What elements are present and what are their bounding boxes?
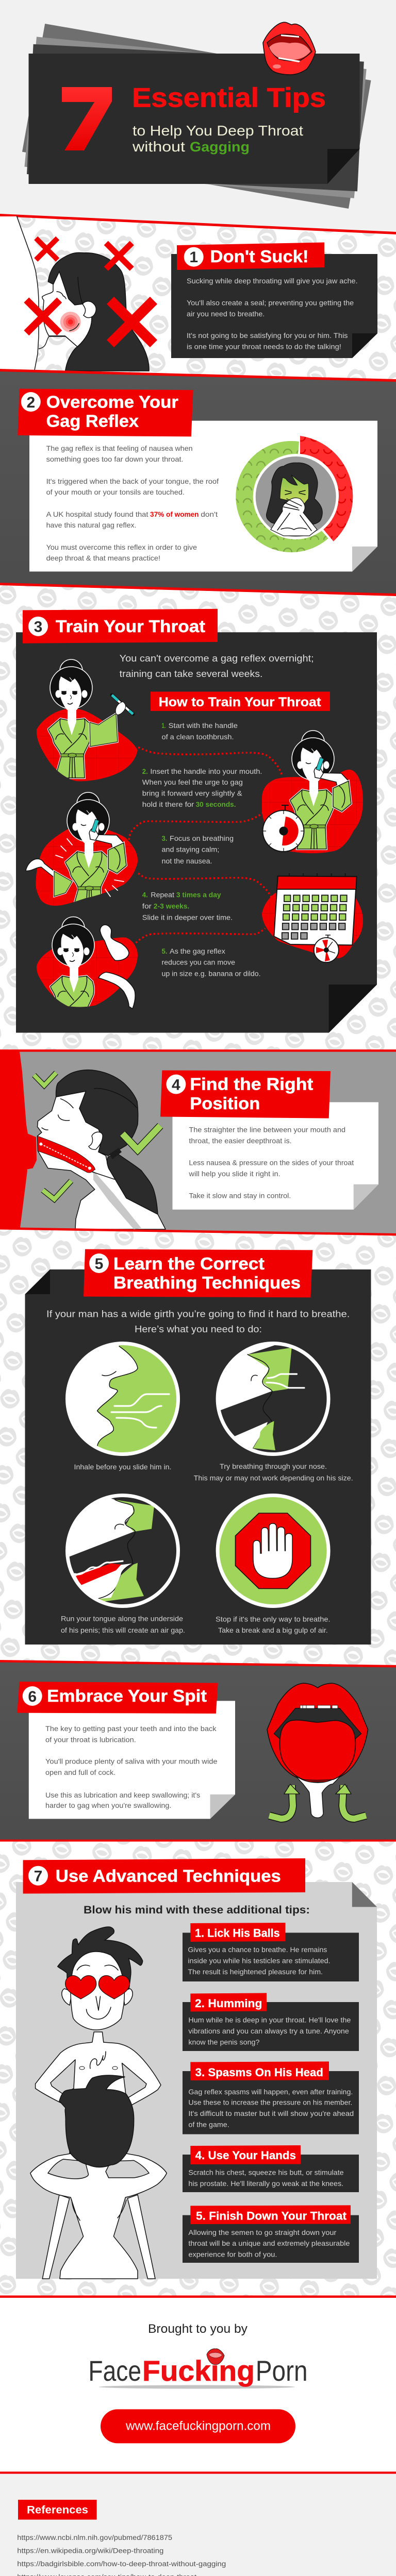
body text: have this natural gag reflex. xyxy=(46,521,137,529)
body text: of your mouth or your tonsils are touched. xyxy=(46,488,185,496)
body text: Sucking while deep throating will give you jaw ache. xyxy=(187,277,358,285)
illustration: stop circle xyxy=(218,1495,328,1606)
heading label: Train Your Throat xyxy=(56,617,205,636)
body text: of your throat is lubrication. xyxy=(45,1735,136,1743)
heading label: 7 xyxy=(34,1868,42,1885)
logo: Porn xyxy=(256,2354,308,2387)
illustration: open mouth with saliva xyxy=(267,1683,368,1819)
sponsor intro: Brought to you by xyxy=(148,2322,248,2336)
heading label: Learn the Correct xyxy=(113,1254,265,1273)
caption: stop xyxy=(216,1615,331,1634)
body text xyxy=(46,444,219,562)
curtain edge xyxy=(0,216,39,371)
illustration: woman with crosses xyxy=(0,216,154,371)
section 5 background xyxy=(0,1227,396,1666)
section 2 background xyxy=(0,369,396,595)
panel: tip 4 xyxy=(160,1071,378,1210)
body text: don't xyxy=(201,510,218,518)
sore cheek xyxy=(60,312,81,332)
caption: nose xyxy=(194,1462,353,1482)
references label xyxy=(18,2500,97,2520)
tip card 4: his prostate. He'll literally go weak at the knees. xyxy=(188,2179,343,2188)
step 3 text: Focus on breathing xyxy=(170,834,234,842)
tip card 1: 1. Lick His Balls xyxy=(195,1926,280,1939)
body text: It's not going to be satisfying for you or him. This xyxy=(187,331,348,340)
illustration: nose breathing circle xyxy=(206,1340,328,1458)
panel: references xyxy=(0,2471,396,2576)
heading label xyxy=(18,388,193,436)
caption: inhale: Inhale before you slide him in. xyxy=(74,1463,171,1471)
heading label xyxy=(17,1682,218,1714)
references label: References xyxy=(27,2504,88,2516)
stacked back cards xyxy=(22,24,371,209)
face xyxy=(70,1952,124,2030)
tip card 1: Gives you a chance to breathe. He remains xyxy=(188,1945,327,1954)
step 3 text: not the nausea. xyxy=(162,857,212,865)
step 5 text: up in size e.g. banana or dildo. xyxy=(162,970,261,978)
title numeral xyxy=(62,87,112,150)
partner figure edge xyxy=(0,1052,37,1228)
subheading label: How to Train Your Throat xyxy=(159,695,321,709)
page fold xyxy=(327,149,360,184)
face xyxy=(42,272,92,347)
body text xyxy=(45,1724,218,1809)
tip card 3: 3. Spasms On His Head xyxy=(195,2066,323,2079)
heading label: Embrace Your Spit xyxy=(47,1686,207,1705)
step 2 text: bring it forward very slightly & xyxy=(142,789,242,798)
step 3 text: and staying calm; xyxy=(162,845,219,853)
tip card 2: 2. Humming xyxy=(195,1997,262,2010)
section 4 background xyxy=(0,1049,396,1234)
illustration: tongue circle xyxy=(57,1489,178,1606)
body text: You'll also create a seal; preventing you getting the xyxy=(187,299,354,307)
page fold xyxy=(210,1794,235,1819)
body text: The key to getting past your teeth and into the back xyxy=(45,1724,217,1733)
tip card 5: Allowing the semen to go straight down your xyxy=(188,2228,337,2236)
step 4 text: 4. xyxy=(142,890,148,899)
heading label: Overcome Your xyxy=(46,393,178,412)
section 7 background xyxy=(0,1839,396,2296)
step 5 text: reduces you can move xyxy=(162,958,235,967)
heading label: Breathing Techniques xyxy=(113,1273,301,1292)
tip card 5: 5. Finish Down Your Throat xyxy=(196,2210,346,2223)
heading label: 5 xyxy=(95,1256,103,1273)
body text: Take it slow and stay in control. xyxy=(189,1191,291,1199)
step 5 text: 5. xyxy=(162,947,167,955)
heading label: Use Advanced Techniques xyxy=(56,1866,281,1885)
heading label xyxy=(177,242,324,270)
figure blobs xyxy=(36,708,363,1007)
body text: will help you slide it right in. xyxy=(188,1170,280,1178)
references list: https://badgirlsbible.com/how-to-deep-throat-without-gagging xyxy=(17,2560,226,2568)
section 1 background xyxy=(0,214,396,380)
step 2 text: 30 seconds. xyxy=(196,800,236,808)
panel: tip 6 xyxy=(17,1682,235,1819)
caption: stop: Take a break and a big gulp of air. xyxy=(218,1626,328,1634)
cross 1 xyxy=(36,238,58,260)
body text: harder to gag when you're swallowing. xyxy=(45,1801,171,1809)
subtitle line 1: to Help You Deep Throat xyxy=(133,123,303,139)
logo: Face xyxy=(88,2354,141,2387)
website button xyxy=(101,2409,295,2443)
tip card 3 xyxy=(183,2061,359,2134)
subtitle line 2: without xyxy=(132,139,185,155)
section 6 background xyxy=(0,1660,396,1840)
logo xyxy=(88,2349,308,2388)
page fold xyxy=(352,1882,377,1907)
heading label xyxy=(23,1858,305,1894)
body text: Use this as lubrication and keep swallowing; it's xyxy=(45,1791,200,1799)
heading label: Gag Reflex xyxy=(46,412,139,431)
step 4 text: 3 times a day xyxy=(176,890,221,899)
step 1 text: 1. xyxy=(162,721,166,730)
torso and arms xyxy=(36,2032,161,2154)
tip card 4: 4. Use Your Hands xyxy=(195,2149,296,2162)
tip card 3: of the game. xyxy=(188,2121,229,2129)
step 2 text: hold it there for xyxy=(142,800,194,808)
step 3 text xyxy=(162,834,234,865)
body text: You'll produce plenty of saliva with your mouth wide xyxy=(45,1757,218,1765)
tip card 5: throat will be a unique and extremely pleasurable xyxy=(188,2239,350,2247)
section 3 background xyxy=(0,583,396,1049)
tip card 4 xyxy=(183,2145,359,2192)
panel: hero xyxy=(0,0,396,233)
icon: lips xyxy=(263,22,316,75)
tip card 3: It's difficult to master but it will show you're ahead xyxy=(188,2109,354,2117)
website button: www.facefuckingporn.com xyxy=(125,2419,271,2433)
panel: tip 5 xyxy=(25,1249,371,1645)
references list: https://en.wikipedia.org/wiki/Deep-throating xyxy=(17,2547,163,2554)
heading label: 2 xyxy=(26,394,35,411)
body text xyxy=(188,1125,354,1199)
panel: tip 7 xyxy=(16,1858,377,2279)
step 4 text: for xyxy=(142,902,152,910)
ear xyxy=(89,1132,103,1149)
body text: Less nausea & pressure on the sides of your throat xyxy=(189,1159,354,1167)
step 5 text: As the gag reflex xyxy=(170,947,225,955)
step 2 text: 2. xyxy=(142,767,148,775)
caption: tongue xyxy=(61,1615,185,1634)
cross 2 xyxy=(106,243,132,269)
chart: 37% donut xyxy=(236,436,353,552)
step 4 text: 2-3 weeks. xyxy=(154,902,189,910)
illustration: inhale circle xyxy=(67,1340,186,1461)
body text: The straighter the line between your mouth and xyxy=(189,1125,345,1133)
step 5 text xyxy=(162,947,261,978)
heading label: Position xyxy=(190,1094,260,1113)
step 3 text: 3. xyxy=(162,834,167,842)
icon: logo lips xyxy=(207,2349,224,2365)
subheading label xyxy=(151,691,330,711)
body text: deep throat & that means practice! xyxy=(46,554,160,562)
heading label: Don't Suck! xyxy=(210,247,308,266)
figure 5: woman with larger objects xyxy=(50,916,136,1009)
step 2 text: Insert the handle into your mouth. xyxy=(150,767,262,775)
intro text: You can't overcome a gag reflex overnight; xyxy=(120,653,314,664)
figure 3: woman breathing calmly xyxy=(26,792,126,911)
neck shadow and head xyxy=(37,1091,166,1229)
page fold xyxy=(329,985,377,1032)
neck xyxy=(39,336,77,349)
caption: tongue: of his penis; this will create an air gap. xyxy=(61,1626,185,1634)
page fold xyxy=(25,1269,50,1294)
dotted connector lines xyxy=(129,747,283,943)
kneeling partner body xyxy=(30,2154,167,2279)
step 4 text: Slide it in deeper over time. xyxy=(142,913,233,921)
panel: tip 2 xyxy=(18,388,377,571)
hair xyxy=(48,252,149,371)
panel: sponsor xyxy=(0,2296,396,2472)
panel: tip 3 xyxy=(16,609,377,1036)
legs xyxy=(42,2195,155,2279)
caption: stop: Stop if it's the only way to breathe. xyxy=(216,1615,331,1623)
page fold xyxy=(352,547,377,571)
heading label: 1 xyxy=(189,249,198,266)
step 4 text xyxy=(142,890,233,921)
body text: You must overcome this reflex in order to give xyxy=(46,543,197,551)
references list: https://www.ncbi.nlm.nih.gov/pubmed/7861875 xyxy=(17,2534,172,2541)
subheading: Blow his mind with these additional tips: xyxy=(84,1904,310,1916)
heading label xyxy=(84,1249,312,1297)
heading label: Find the Right xyxy=(190,1075,313,1094)
tip card 2: vibrations and you can always try a tune. Anyone xyxy=(188,2027,349,2035)
tip card 1: inside you while his testicles are stimulated. xyxy=(188,1957,331,1965)
caption: nose: Try breathing through your nose. xyxy=(220,1462,327,1470)
cross 4 xyxy=(110,300,154,344)
body text: throat, the easier deepthroat is. xyxy=(189,1137,292,1145)
tip card 3: Gag reflex spasms will happen, even after training. xyxy=(188,2088,353,2096)
ponytail xyxy=(107,1155,158,1214)
body text: air you need to breathe. xyxy=(187,310,265,318)
step 1 text: of a clean toothbrush. xyxy=(162,733,234,741)
ear xyxy=(82,301,96,318)
panel: tip 1 xyxy=(171,242,377,358)
hair xyxy=(58,1927,143,1991)
heading label: 6 xyxy=(28,1688,37,1705)
subtitle green word: Gagging xyxy=(190,139,250,155)
step 1 text: Start with the handle xyxy=(169,721,238,730)
check 3 xyxy=(43,1181,71,1199)
page fold xyxy=(352,333,377,358)
page fold xyxy=(354,1184,378,1210)
body text: The gag reflex is that feeling of nausea when xyxy=(46,444,193,452)
logo: Fucking xyxy=(142,2354,255,2387)
tip card 3: Use these to increase the pressure on his member. xyxy=(188,2098,352,2106)
heading label xyxy=(160,1071,331,1118)
tip card 2: Hum while he is deep in your throat. He'll love the xyxy=(188,2015,351,2024)
step 2 text xyxy=(142,767,262,808)
icon: small timer xyxy=(314,935,339,962)
heading label xyxy=(23,609,218,643)
tip card 4: Scratch his chest, squeeze his butt, or stimulate xyxy=(188,2168,344,2176)
illustration: throat alignment xyxy=(0,1052,166,1229)
highlighted throat path xyxy=(37,1136,95,1173)
intro text xyxy=(46,1309,350,1334)
body text: is one time your throat needs to do the talking! xyxy=(187,342,341,350)
icon: timer xyxy=(263,805,304,852)
caption: tongue: Run your tongue along the underside xyxy=(61,1615,183,1623)
intro text: Here’s what you need to do: xyxy=(135,1324,262,1334)
title text: Essential Tips xyxy=(132,83,326,113)
chest details xyxy=(90,2052,106,2069)
check 2 xyxy=(123,1126,160,1150)
body text xyxy=(187,277,358,350)
body text: 37% of women xyxy=(150,510,199,518)
tip card 1 xyxy=(183,1923,359,1981)
intro text xyxy=(120,653,314,679)
heading label: 3 xyxy=(34,618,42,636)
step 2 text: When you feel the urge to gag xyxy=(142,778,243,786)
illustration: nauseous woman xyxy=(267,463,322,536)
step 4 text: Repeat xyxy=(151,890,174,899)
figure 2: woman with brush and timer xyxy=(263,731,351,852)
illustration: happy man xyxy=(30,1927,167,2279)
ears xyxy=(62,1989,133,2005)
body text: open and full of cock. xyxy=(45,1768,116,1776)
body text: something goes too far down your throat. xyxy=(46,455,184,463)
heart eyes xyxy=(65,1976,129,1999)
tip card 2 xyxy=(183,1993,359,2051)
tip card 5 xyxy=(183,2205,359,2263)
body text: It's triggered when the back of your tongue, the roof xyxy=(46,477,219,485)
references list xyxy=(17,2534,358,2576)
hair xyxy=(56,1070,138,1156)
body text: A UK hospital study found that xyxy=(46,510,148,518)
tip card 2: know the penis song? xyxy=(188,2038,260,2046)
tip card 1: The result is heightened pleasure for him. xyxy=(188,1968,323,1976)
intro text: training can take several weeks. xyxy=(120,669,262,679)
figure 1: woman holding brush xyxy=(48,659,133,778)
icon: calendar xyxy=(274,873,357,962)
step 1 text xyxy=(162,721,238,741)
caption: nose: This may or may not work depending on his size. xyxy=(194,1473,353,1482)
tip card 5: experience for both of you. xyxy=(188,2250,277,2259)
cross 3 xyxy=(26,300,59,333)
intro text: If your man has a wide girth you’re going to find it hard to breathe. xyxy=(46,1309,350,1319)
main title card xyxy=(29,54,360,184)
check 1 xyxy=(34,1073,56,1086)
heading label: 4 xyxy=(172,1077,180,1093)
partner hair xyxy=(59,2075,134,2167)
